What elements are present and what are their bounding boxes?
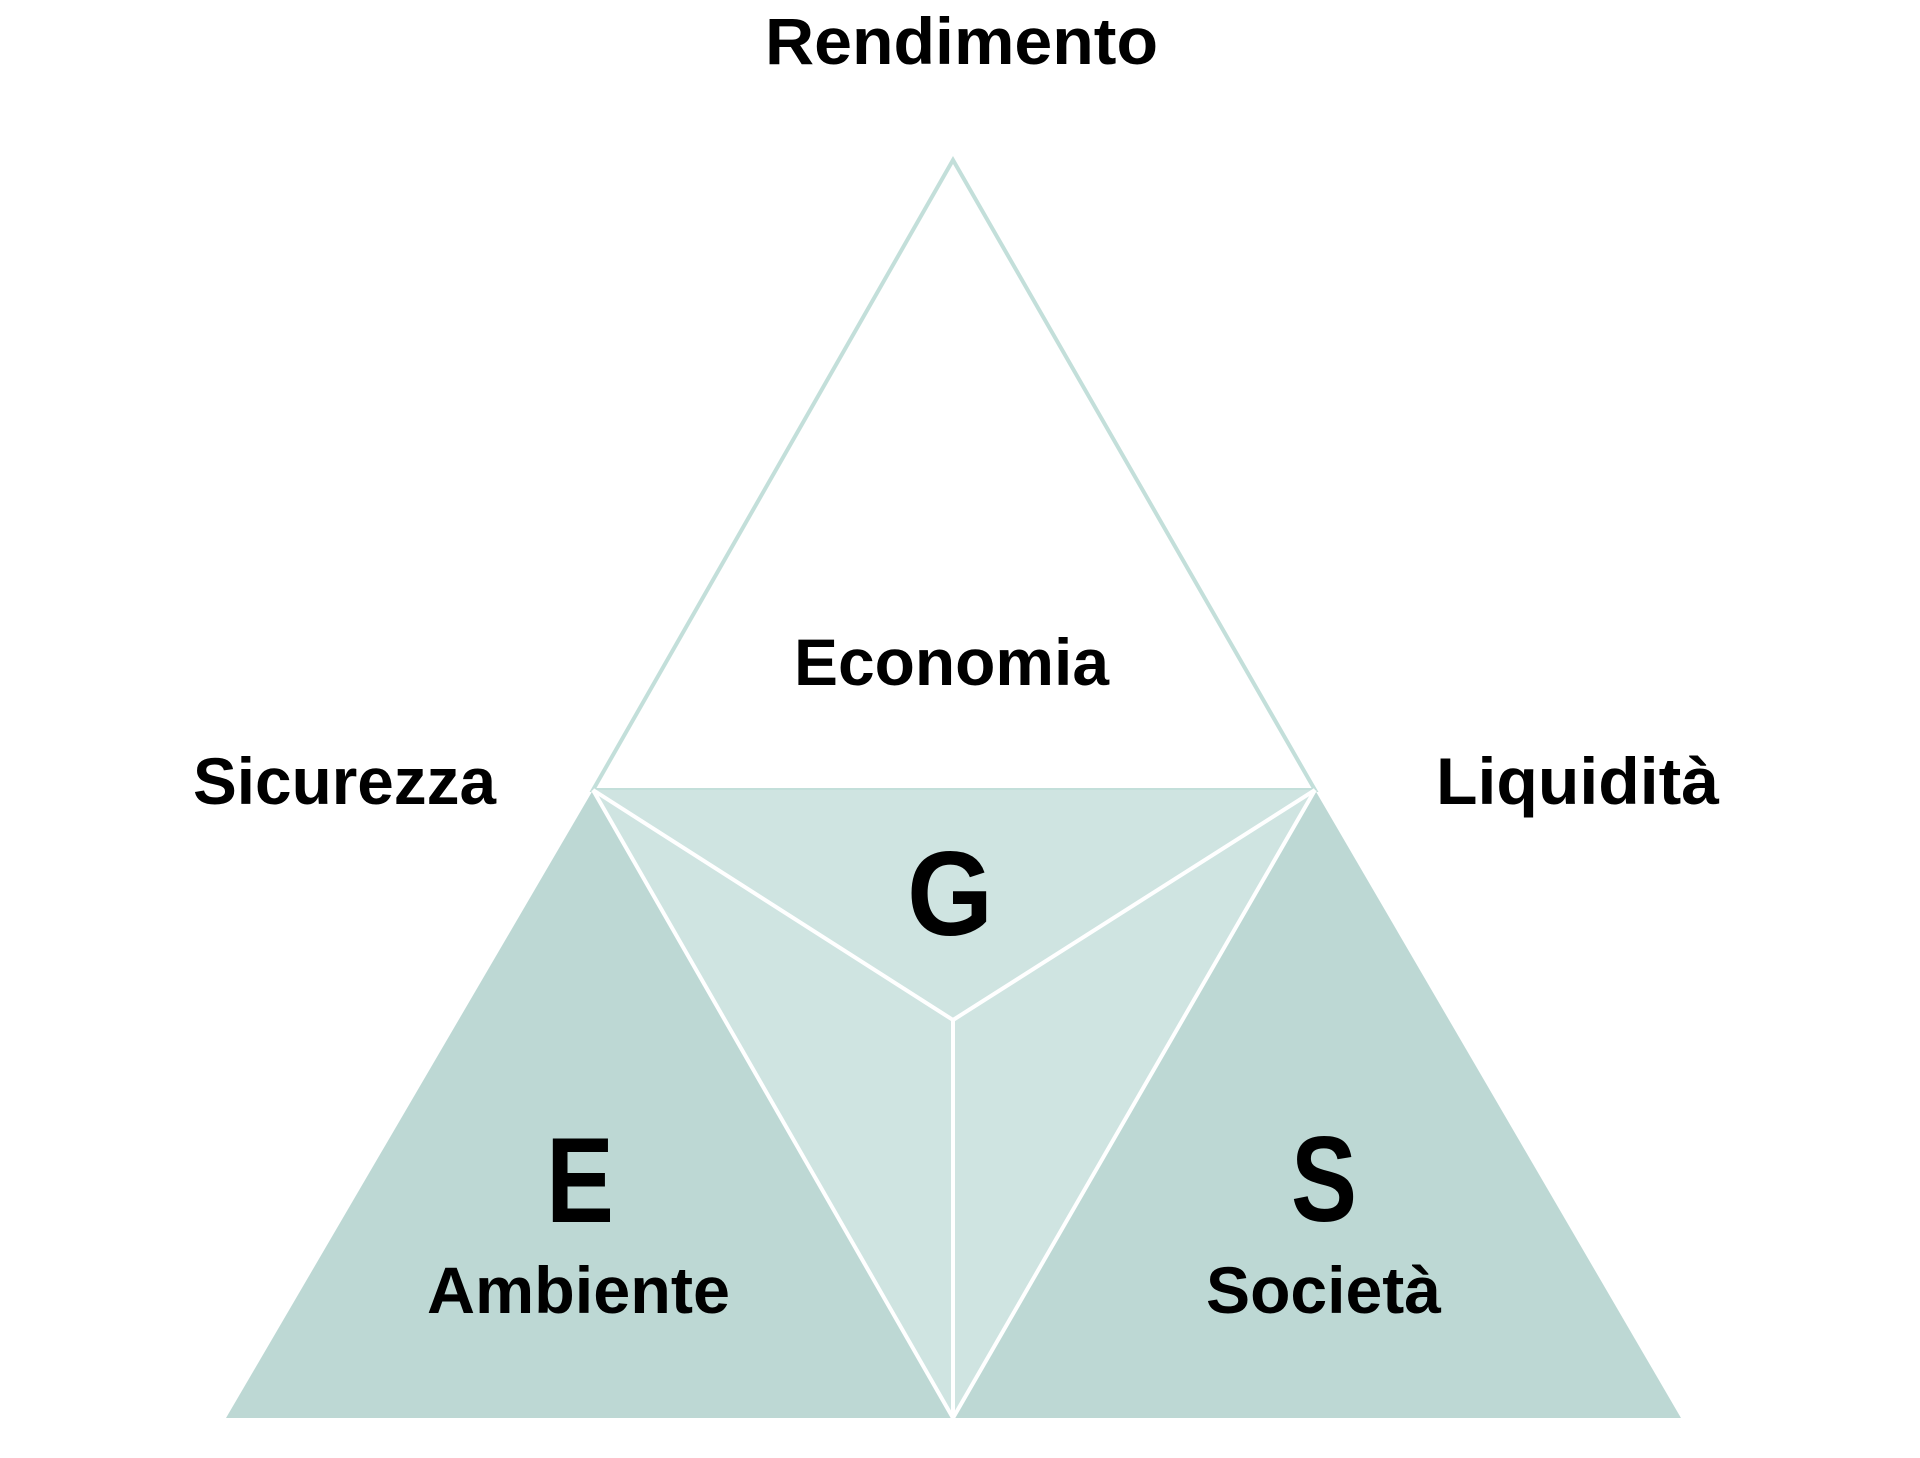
panel: top triangle, Economia [593,160,1315,790]
letter: G: G [907,827,993,961]
panel: G central triangle, Governance [593,790,1315,1418]
label: Rendimento: Rendimento [765,4,1158,78]
label: Società: Società [1206,1253,1441,1327]
letter: S: S [1291,1111,1357,1247]
label: Ambiente: Ambiente [427,1253,730,1327]
panel: E triangle, Ambiente [226,790,953,1418]
panel: S triangle, Società [953,790,1681,1418]
label: Economia: Economia [794,625,1110,699]
label: Liquidità: Liquidità [1436,744,1719,818]
label: Sicurezza: Sicurezza [193,744,497,818]
white dividing lines [593,790,1315,1418]
letter: E: E [546,1112,614,1248]
